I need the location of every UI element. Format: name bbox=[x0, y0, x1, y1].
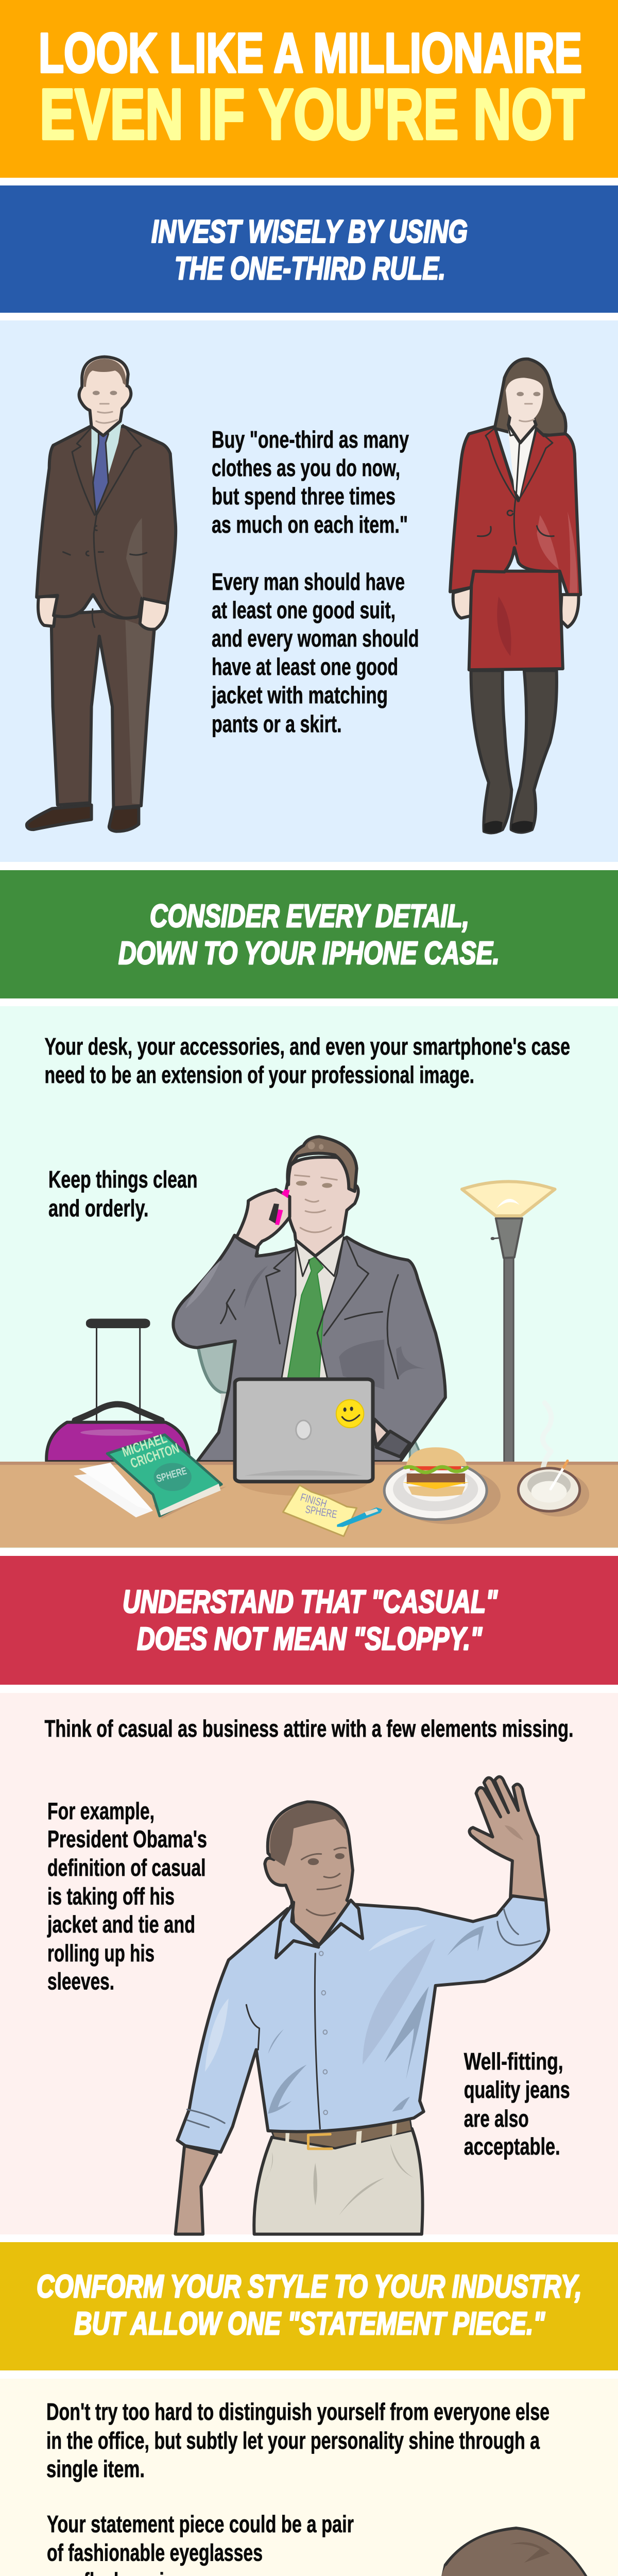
text: president obama definition: sleeves. bbox=[47, 1968, 114, 1995]
panel: section 1 body bbox=[0, 320, 618, 862]
panel: section 4 header bbox=[0, 2242, 618, 2370]
illustration: ashtray and cigarette bbox=[518, 1403, 589, 1517]
illustration: woman in red suit bbox=[450, 359, 580, 833]
text: professional image bbox=[44, 1033, 570, 1088]
heading: one-third rule: THE ONE-THIRD RULE. bbox=[175, 251, 445, 286]
text: quality jeans: Well-fitting, bbox=[464, 2048, 563, 2075]
illustration: floor lamp bbox=[462, 1181, 555, 1463]
heading: one-third rule: INVEST WISELY BY USING bbox=[151, 214, 468, 249]
text: president obama definition: definition of casual bbox=[47, 1854, 206, 1881]
text: keep things clean bbox=[48, 1166, 198, 1222]
text: president obama definition: is taking off his bbox=[47, 1883, 175, 1909]
text: statement piece examples: Your statement piece could be a pair bbox=[47, 2511, 354, 2537]
panel: section 3 header bbox=[0, 1556, 618, 1685]
text: distinguish yourself bbox=[46, 2398, 550, 2482]
heading: statement piece bbox=[37, 2269, 582, 2342]
text: distinguish yourself: single item. bbox=[46, 2455, 145, 2482]
illustration: waving man in blue shirt bbox=[176, 1777, 548, 2234]
text: president obama definition: rolling up his bbox=[47, 1940, 154, 1967]
title bbox=[39, 22, 585, 155]
illustration: man from behind bbox=[334, 2528, 618, 2576]
text: president obama definition: jacket and tie and bbox=[47, 1911, 195, 1938]
heading: casual not sloppy: DOES NOT MEAN "SLOPPY." bbox=[137, 1621, 483, 1657]
text: buy one-third: at least one good suit, bbox=[212, 597, 396, 623]
heading: every detail bbox=[118, 899, 500, 971]
panel: title banner bbox=[0, 0, 618, 178]
text: quality jeans: quality jeans bbox=[464, 2076, 570, 2103]
text: keep things clean: and orderly. bbox=[48, 1195, 148, 1222]
heading: one-third rule bbox=[151, 214, 468, 286]
text: buy one-third: jacket with matching bbox=[211, 682, 388, 708]
heading: casual not sloppy: UNDERSTAND THAT "CASUAL" bbox=[123, 1584, 498, 1620]
panel: section 1 header bbox=[0, 185, 618, 313]
text: statement piece examples bbox=[47, 2511, 354, 2576]
panel: section 2 header bbox=[0, 870, 618, 998]
illustration: man on phone bbox=[173, 1137, 445, 1462]
text: professional image: need to be an extension of your professional image. bbox=[44, 1061, 474, 1088]
icon: smiley sticker bbox=[336, 1400, 364, 1428]
text: buy one-third: but spend three times bbox=[212, 483, 396, 510]
text: president obama definition: For example, bbox=[47, 1798, 154, 1824]
text: buy one-third: as much on each item." bbox=[212, 511, 408, 538]
text: president obama definition bbox=[47, 1798, 207, 1995]
illustration: burger on plate bbox=[384, 1447, 501, 1524]
text: keep things clean: Keep things clean bbox=[48, 1166, 198, 1193]
text: statement piece examples: of fashionable eyeglasses bbox=[47, 2539, 263, 2566]
illustration: papers and book bbox=[74, 1430, 227, 1519]
illustration: laptop bbox=[235, 1379, 373, 1482]
illustration: papers and book: CRICHTON bbox=[128, 1440, 181, 1471]
text: buy one-third: Buy "one-third as many bbox=[212, 426, 409, 453]
illustration: papers and book: SPHERE bbox=[155, 1465, 188, 1485]
text: buy one-third: clothes as you do now, bbox=[212, 454, 400, 481]
panel: section 2 body bbox=[0, 1006, 618, 1548]
illustration: man in brown suit bbox=[27, 357, 176, 832]
illustration: note and pen: SPHERE bbox=[304, 1503, 338, 1521]
illustration: desk bbox=[0, 1462, 618, 1548]
text: buy one-third: and every woman should bbox=[212, 625, 419, 652]
text: president obama definition: President Obama's bbox=[47, 1826, 207, 1853]
text: buy one-third: pants or a skirt. bbox=[212, 710, 342, 737]
text: quality jeans bbox=[464, 2048, 570, 2160]
panel: section 4 body bbox=[0, 2379, 618, 2576]
text: quality jeans: acceptable. bbox=[464, 2133, 560, 2160]
text: buy one-third: have at least one good bbox=[212, 653, 398, 680]
illustration: note and pen bbox=[283, 1485, 382, 1536]
text: buy one-third: Every man should have bbox=[212, 568, 405, 595]
text: buy one-third bbox=[211, 426, 419, 737]
illustration: note and pen: FINISH bbox=[299, 1492, 328, 1510]
illustration: suitcase bbox=[46, 1320, 189, 1462]
heading: every detail: CONSIDER EVERY DETAIL, bbox=[150, 899, 469, 934]
text: quality jeans: are also bbox=[464, 2105, 529, 2132]
panel: section 3 body bbox=[0, 1693, 618, 2234]
illustration: papers and book: MICHAEL bbox=[120, 1430, 169, 1460]
heading: every detail: DOWN TO YOUR IPHONE CASE. bbox=[118, 936, 500, 971]
heading: casual not sloppy bbox=[123, 1584, 498, 1657]
